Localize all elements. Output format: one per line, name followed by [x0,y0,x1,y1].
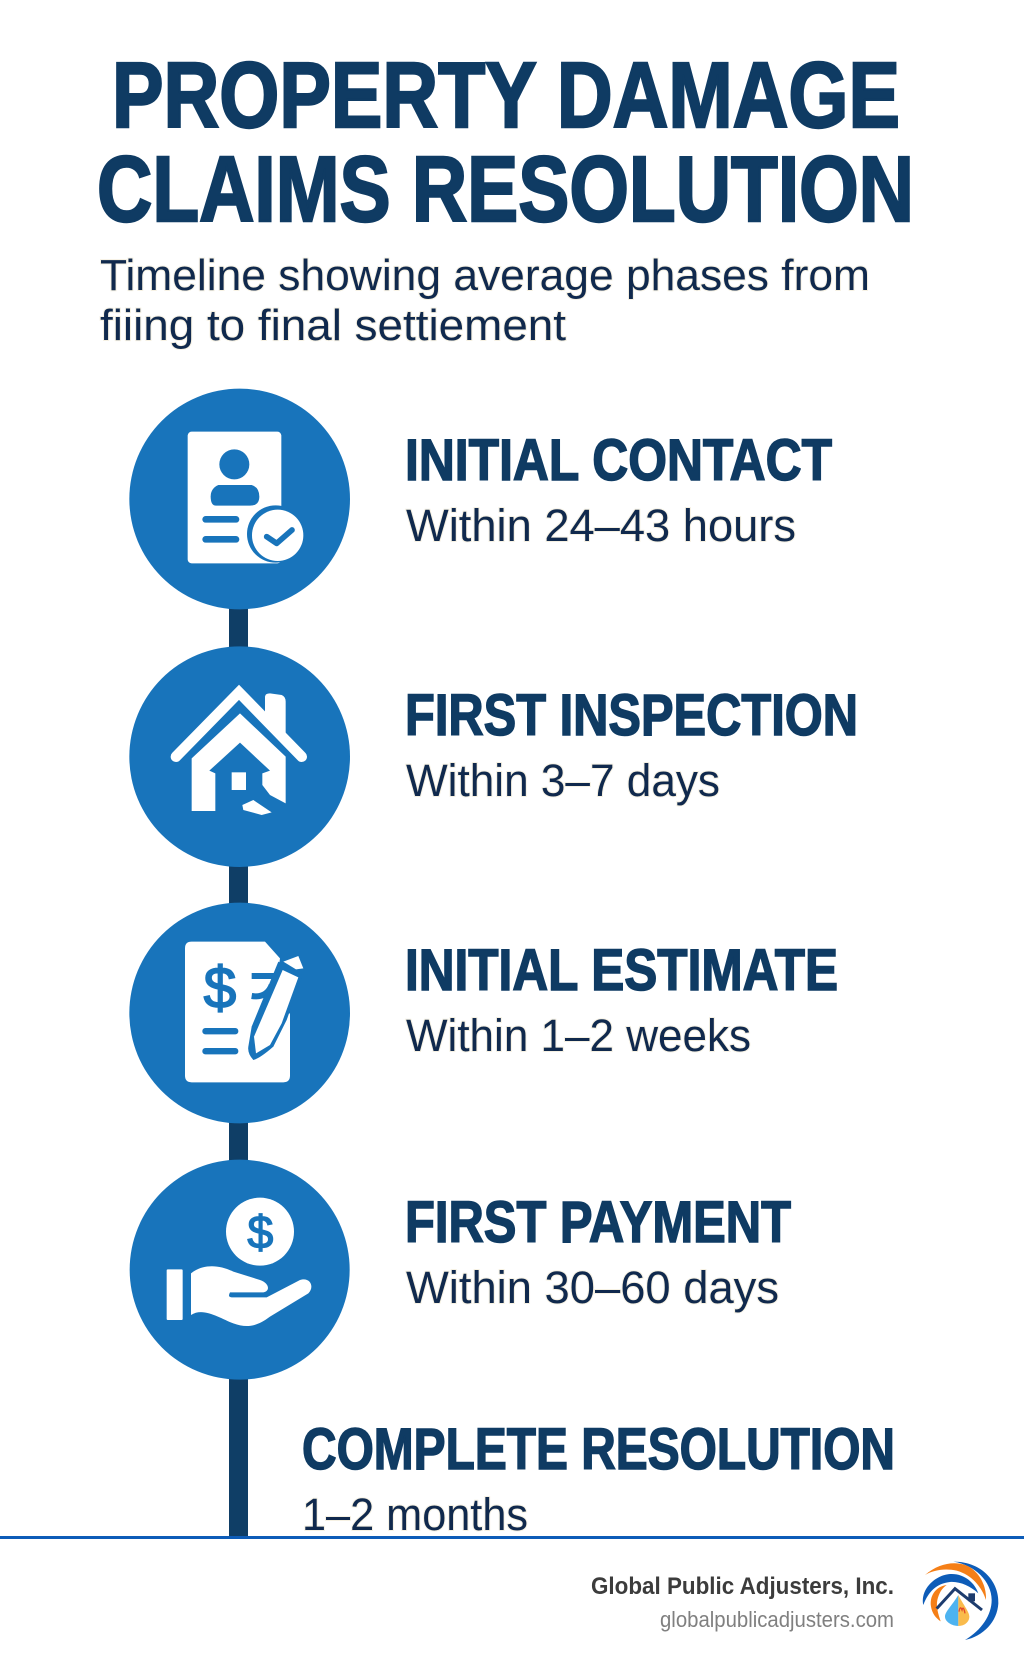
icon: estimate document with pen [129,903,350,1123]
step 1: initial contact [129,389,832,609]
heading: initial contact: INITIAL CONTACT [405,428,832,493]
duration: initial contact: Within 24–43 hours [406,500,796,551]
title [97,43,914,241]
icon: damaged house [129,646,350,867]
website: globalpublicadjusters.com [660,1607,894,1632]
subtitle [100,251,870,350]
step 4: first payment [130,1160,791,1380]
duration: complete resolution: 1–2 months [302,1489,528,1540]
footer rule [0,1536,1024,1539]
subtitle: fiiing to final settiement [100,301,566,350]
timeline connector [229,600,248,1537]
icon: document with person and check [129,389,350,609]
company name: Global Public Adjusters, Inc. [591,1573,894,1600]
footer brand [591,1562,998,1640]
step 2: first inspection [129,646,858,867]
icon: estimate document with pen: $ [204,955,236,1020]
icon: hand receiving coin: $ [247,1206,273,1258]
heading: complete resolution: COMPLETE RESOLUTION [302,1417,895,1482]
heading: first inspection: FIRST INSPECTION [405,683,858,748]
step 3: initial estimate [129,903,838,1123]
heading: initial estimate: INITIAL ESTIMATE [405,938,838,1003]
duration: first inspection: Within 3–7 days [406,755,720,806]
icon: hand receiving coin [130,1160,350,1380]
step 5: complete resolution [302,1417,895,1540]
subtitle: Timeline showing average phases from [100,251,870,300]
duration: first payment: Within 30–60 days [406,1262,779,1313]
duration: initial estimate: Within 1–2 weeks [406,1010,751,1061]
icon: company logo [923,1562,998,1640]
heading: first payment: FIRST PAYMENT [405,1190,791,1255]
